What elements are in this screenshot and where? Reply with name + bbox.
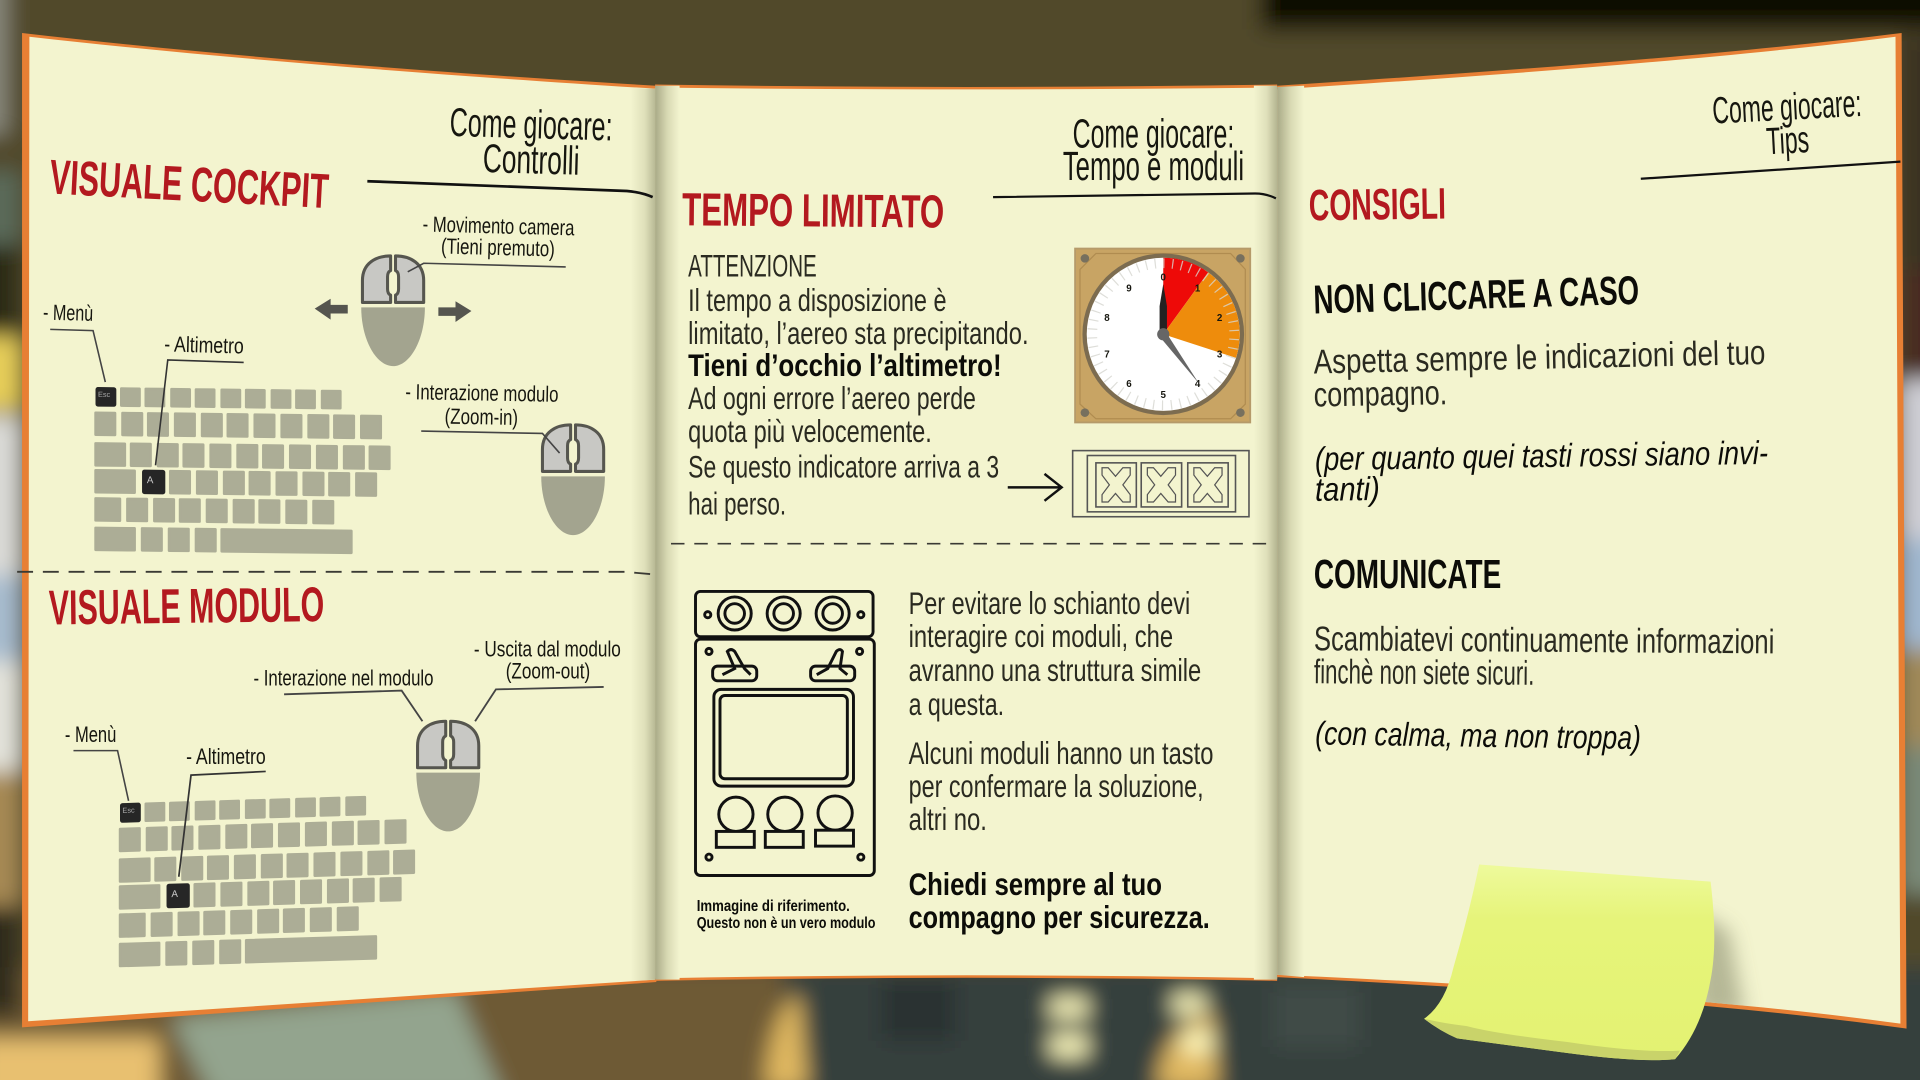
heading: consigli: CONSIGLI <box>1308 179 1446 230</box>
icon: altimeter gauge: 5 <box>1161 390 1167 401</box>
tip: non cliccare a caso: NON CLICCARE A CASO <box>1313 267 1640 322</box>
tip: comunicate: COMUNICATE <box>1314 551 1501 597</box>
text block: module explanation <box>909 585 1213 935</box>
icon: altimeter gauge: 4 <box>1195 379 1201 390</box>
icon: error indicator <box>1073 451 1249 517</box>
label: altimetro cockpit <box>156 331 244 465</box>
sticky note <box>1424 864 1714 1060</box>
mouse: zoom in <box>541 425 605 535</box>
label: altimetro cockpit: - Altimetro <box>164 331 244 359</box>
panel: controls page (left) <box>17 33 656 1027</box>
heading: visuale modulo: VISUALE MODULO <box>48 578 325 635</box>
heading: tempo limitato: TEMPO LIMITATO <box>682 183 944 238</box>
tip: non cliccare a caso: Aspetta sempre le indicazioni del tuo <box>1313 334 1766 381</box>
caption: reference image: Immagine di riferimento. <box>697 898 850 915</box>
heading: page tag tempo e moduli <box>993 111 1276 198</box>
arrow: left <box>315 299 348 320</box>
label: altimetro modulo <box>179 744 266 877</box>
mouse: movimento camera <box>361 256 425 366</box>
label: interazione nel modulo <box>253 666 433 721</box>
heading: page tag controlli: Controlli <box>482 135 580 184</box>
tip: comunicate: Scambiatevi continuamente informazioni <box>1314 620 1774 661</box>
text block: module explanation: Per evitare lo schianto devi <box>909 585 1190 621</box>
label: altimetro modulo: - Altimetro <box>186 744 266 769</box>
text block: attenzione: ATTENZIONE <box>688 248 817 284</box>
icon: module diagram <box>696 591 874 876</box>
tip: non cliccare a caso: tanti) <box>1315 471 1380 509</box>
shadow: sticky note <box>1706 910 1752 1006</box>
text block: module explanation: compagno per sicurezza. <box>909 899 1210 935</box>
heading: page tag controlli: Come giocare: <box>449 99 613 149</box>
text block: attenzione: limitato, l’aereo sta precipitando. <box>688 315 1029 351</box>
icon: altimeter gauge: 0 <box>1161 272 1167 283</box>
tip: non cliccare a caso: (per quanto quei tasti rossi siano invi- <box>1315 435 1768 478</box>
arrow: to indicator <box>1008 474 1062 501</box>
heading: page tag tips <box>1641 83 1900 179</box>
caption: reference image: Questo non è un vero modulo <box>697 915 876 932</box>
icon: altimeter gauge: 2 <box>1217 313 1223 324</box>
label: menu modulo: - Menù <box>65 722 116 747</box>
heading: page tag tempo e moduli: Tempo e moduli <box>1063 143 1244 189</box>
panel: tips page (right) <box>1277 33 1907 1029</box>
text block: module explanation: altri no. <box>909 801 987 837</box>
label: menu cockpit <box>43 300 105 382</box>
caption: reference image <box>697 898 876 932</box>
icon: altimeter gauge: 3 <box>1217 350 1223 361</box>
leader line: movimento camera <box>408 263 566 272</box>
text block: module explanation: avranno una struttura simile <box>909 652 1201 688</box>
icon: altimeter gauge: 1 <box>1195 283 1201 294</box>
arrow: right <box>438 301 471 322</box>
text block: attenzione: hai perso. <box>688 485 786 521</box>
label: uscita dal modulo: (Zoom-out) <box>506 658 590 683</box>
text block: module explanation: interagire coi moduli, che <box>909 618 1173 654</box>
text block: attenzione: Il tempo a disposizione è <box>688 282 947 318</box>
icon: altimeter gauge: 8 <box>1104 313 1110 324</box>
label: movimento camera: (Tieni premuto) <box>441 233 555 261</box>
tip: comunicate <box>1314 551 1774 757</box>
label: movimento camera: - Movimento camera <box>422 211 575 240</box>
icon: altimeter gauge: 6 <box>1126 379 1132 390</box>
text block: module explanation: a questa. <box>909 686 1004 722</box>
keyboard: cockpit <box>96 387 389 553</box>
heading: page tag controlli <box>367 99 653 197</box>
icon: altimeter gauge: 9 <box>1126 283 1132 294</box>
heading: page tag tips: Tips <box>1765 119 1810 163</box>
icon: altimeter gauge <box>1075 249 1250 422</box>
label: interazione modulo: (Zoom-in) <box>444 404 518 430</box>
label: interazione nel modulo: - Interazione nel modulo <box>253 666 433 691</box>
label: menu modulo <box>65 722 129 801</box>
tip: comunicate: (con calma, ma non troppa) <box>1315 715 1641 757</box>
text block: module explanation: Chiedi sempre al tuo <box>909 866 1162 902</box>
text block: module explanation: Alcuni moduli hanno un tasto <box>909 735 1213 771</box>
label: uscita dal modulo: - Uscita dal modulo <box>474 636 621 661</box>
label: menu cockpit: - Menù <box>43 300 94 326</box>
text block: attenzione <box>688 248 1029 521</box>
icon: altimeter gauge: 7 <box>1104 350 1110 361</box>
label: movimento camera <box>422 211 575 261</box>
tip: non cliccare a caso: compagno. <box>1313 374 1447 415</box>
panel: tempo e moduli page (middle) <box>655 84 1277 981</box>
text block: attenzione: Se questo indicatore arriva a 3 <box>688 449 999 485</box>
keyboard: modulo <box>120 794 414 966</box>
leader line: zoom in <box>421 431 560 453</box>
label: uscita dal modulo <box>474 636 621 721</box>
text block: attenzione: Ad ogni errore l’aereo perde <box>688 380 976 416</box>
label: interazione modulo <box>405 379 559 430</box>
mouse: modulo <box>416 721 480 831</box>
text block: attenzione: quota più velocemente. <box>688 413 932 449</box>
heading: page tag tempo e moduli: Come giocare: <box>1073 111 1234 157</box>
label: interazione modulo: - Interazione modulo <box>405 379 559 407</box>
tip: non cliccare a caso <box>1313 267 1768 509</box>
text block: module explanation: per confermare la soluzione, <box>909 768 1204 804</box>
text block: attenzione: Tieni d’occhio l’altimetro! <box>688 347 1002 383</box>
heading: visuale cockpit: VISUALE COCKPIT <box>48 151 330 219</box>
tip: comunicate: finchè non siete sicuri. <box>1314 653 1534 693</box>
